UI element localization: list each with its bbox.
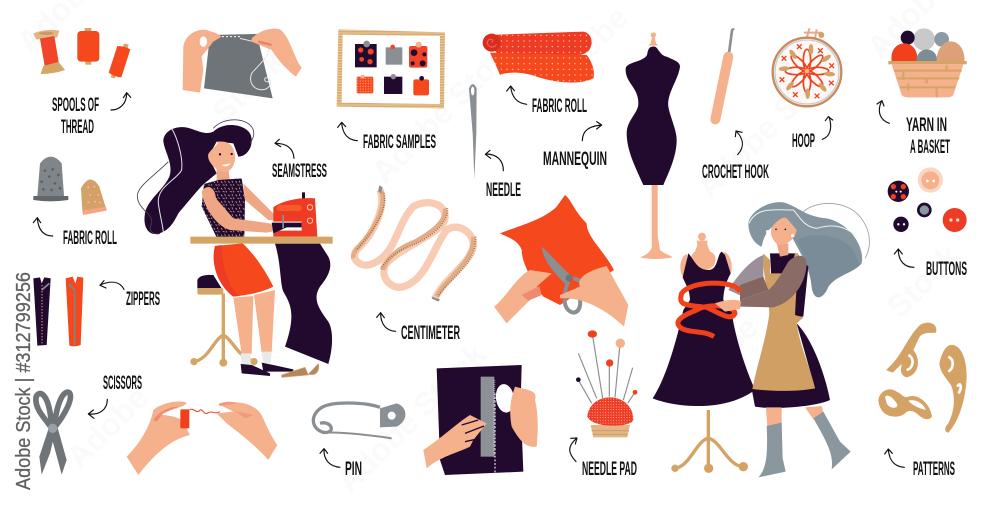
- legs and boots: [758, 406, 851, 477]
- icon: yarn in a basket: [888, 28, 967, 97]
- text: Adobe Stock: [689, 41, 853, 205]
- arrow: hoop: [822, 117, 833, 139]
- icon: needle: [469, 84, 477, 179]
- text: Adobe Stock: [364, 26, 528, 190]
- text: NEEDLE PAD: [582, 459, 637, 480]
- arrow: fabric samples: [338, 122, 357, 141]
- text: Stock: [879, 238, 967, 325]
- icon: buttons: [888, 167, 967, 232]
- hand: [715, 300, 741, 312]
- label: mannequin: MANNEQUIN: [543, 149, 607, 170]
- arms: [202, 183, 293, 233]
- icon: mannequin: [626, 32, 680, 259]
- icon: crochet hook: [715, 29, 734, 119]
- woman skirt and apron: [752, 253, 830, 408]
- label: pin: PIN: [345, 459, 362, 480]
- text: SCISSORS: [103, 373, 142, 394]
- text: Adobe Stock: [329, 336, 493, 500]
- arrow: pin: [320, 449, 340, 467]
- icon: embroidery hoop: [773, 28, 841, 106]
- text: ZIPPERS: [126, 289, 160, 310]
- icon: spools of thread: [33, 28, 130, 79]
- icon: needle pad: [576, 330, 637, 437]
- sewing machine: [272, 192, 317, 237]
- icon: french curve patterns: [878, 323, 967, 433]
- blouse: [202, 178, 245, 237]
- face and neck: [766, 218, 797, 257]
- icon: zippers: [33, 277, 83, 346]
- arrow: seamstress: [275, 139, 294, 158]
- icon: safety pin: [313, 403, 405, 438]
- arrow: mannequin: [582, 122, 602, 141]
- arrow: zippers: [100, 281, 124, 289]
- icon: hands threading a spool: [127, 401, 277, 475]
- icon: seamstress at sewing machine: [137, 120, 333, 364]
- text: FABRIC SAMPLES: [363, 132, 436, 153]
- black dress: [653, 252, 755, 406]
- arrow: buttons: [894, 249, 914, 267]
- arrow: scissors: [88, 399, 107, 418]
- arrow: yarn: [877, 101, 889, 123]
- icon: thimbles: [33, 157, 107, 215]
- icon: hands cutting red fabric: [494, 195, 628, 327]
- image id watermark: Adobe Stock | #312799256: [13, 272, 35, 490]
- measuring ribbon: [678, 283, 740, 337]
- text: CENTIMETER: [401, 323, 460, 344]
- illustration: tailor fitting dress on mannequin: [653, 202, 869, 477]
- stool: [190, 275, 258, 367]
- arms: [728, 255, 807, 307]
- text: SPOOLS OF: [52, 95, 99, 116]
- text: NEEDLE: [486, 180, 521, 201]
- text: Stock: [204, 43, 292, 130]
- text: FABRIC ROLL: [532, 96, 587, 117]
- icon: measuring tape: [353, 185, 476, 302]
- text: Adobe: [59, 379, 155, 475]
- text: SEAMSTRESS: [272, 161, 327, 182]
- icon: fabric samples board: [337, 29, 445, 108]
- hair: [748, 202, 869, 297]
- arrow: centimeter: [377, 313, 396, 331]
- icon: hands sewing grey cloth: [183, 29, 302, 98]
- text: HOOP: [792, 131, 815, 152]
- dress stand: [671, 410, 748, 473]
- dark fabric falling from the table: [275, 244, 332, 364]
- text: Adobe: [669, 309, 765, 405]
- text: FABRIC ROLL: [63, 228, 117, 249]
- arrow: thimbles: [33, 218, 53, 236]
- arrow: crochet hook: [735, 131, 742, 155]
- arrow: needle pad: [570, 438, 577, 462]
- table: [190, 237, 333, 244]
- arrow: patterns: [885, 449, 904, 467]
- text: Adobe: [539, 0, 635, 95]
- icon: fabric roll: [483, 32, 594, 83]
- neck and face: [208, 141, 235, 182]
- lower seamstress: stool and legs: [190, 275, 319, 377]
- arrow: needle: [485, 150, 503, 171]
- icon: scissors: [36, 392, 70, 475]
- pedal: [282, 363, 319, 377]
- label: yarn in: YARN IN: [906, 115, 947, 136]
- legs and shoes: [233, 290, 293, 376]
- arrow: fabric roll: [507, 86, 527, 104]
- icon: hands with ruler and chalk on dark cloth: [423, 365, 538, 475]
- text: CROCHET HOOK: [702, 162, 769, 183]
- hair: [137, 120, 254, 234]
- arrow: spools: [111, 93, 131, 110]
- skirt: [214, 243, 273, 297]
- text: THREAD: [61, 117, 94, 138]
- mannequin body: [680, 233, 732, 278]
